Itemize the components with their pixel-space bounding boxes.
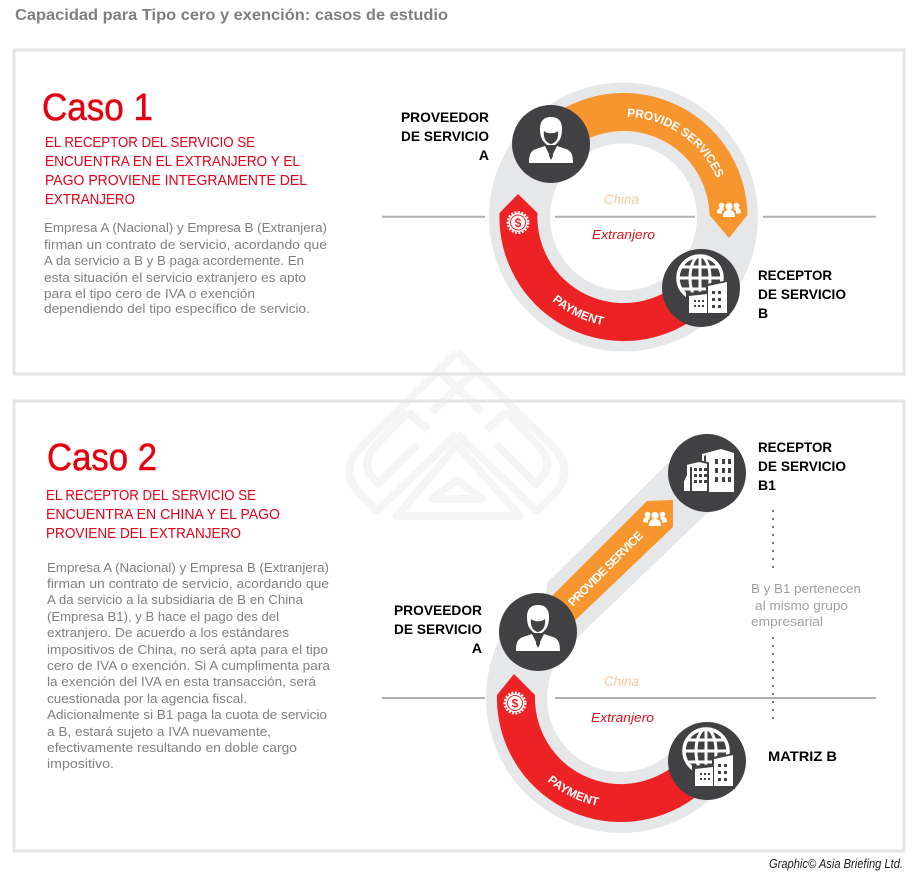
label: provider A: [401, 109, 489, 163]
arrow label: payment: PAYMENT: [552, 294, 604, 324]
label: Extranjero: Extranjero: [591, 710, 654, 725]
body text: case 1: [44, 220, 327, 316]
arrow label: payment: PAYMENT: [548, 775, 600, 806]
icon: people: [717, 203, 741, 217]
icon: provider A: [512, 105, 590, 183]
panel border: case 1: [14, 50, 904, 374]
icon: receiver B: [662, 249, 740, 327]
border dividers: [382, 216, 876, 218]
panel: case 1: [12, 48, 906, 376]
body text: case 2: la exención del IVA en esta transacción, será: [47, 674, 317, 689]
arrow: provide service: [540, 500, 673, 630]
watermark logo: [349, 352, 565, 516]
subheading: case 2: PROVIENE DEL EXTRANJERO: [46, 526, 241, 542]
label: receiver B1: RECEPTOR: [758, 439, 832, 455]
icon: provider A: [499, 593, 577, 671]
icon: dollar coin: [504, 692, 526, 714]
heading: Caso 2: Caso 2: [47, 437, 157, 479]
arrow: provide services: [560, 93, 748, 238]
body text: case 2: A da servicio a la subsidiaria de B en China: [47, 592, 304, 607]
body text: case 2: cuestionada por la agencia fiscal.: [47, 691, 247, 706]
subheading: case 1: [45, 135, 307, 208]
label: provider A: PROVEEDOR: [401, 109, 489, 125]
body text: case 2: impositivos de China, no será apta para el tipo: [47, 642, 328, 657]
panel border: case 2: [14, 401, 904, 851]
credit: Graphic© Asia Briefing Ltd.: [769, 857, 903, 871]
label: provider A: PROVEEDOR: [394, 602, 482, 618]
body text: case 2: (Empresa B1), y B hace el pago des del: [47, 609, 279, 624]
label: receiver B: [758, 267, 846, 321]
body text: case 1: Empresa A (Nacional) y Empresa B (Extranjera): [44, 220, 327, 235]
body text: case 2: impositivo.: [47, 756, 114, 771]
right divider: [555, 697, 876, 699]
gray track: [517, 463, 730, 802]
diagram: case 2 flow: [382, 434, 876, 833]
label: China: China: [604, 191, 639, 207]
body text: case 2: efectivamente resultando en doble cargo: [47, 740, 297, 755]
label: China: China: [604, 673, 639, 689]
note: same business group: [751, 581, 861, 629]
body text: case 1: dependiendo del tipo específico de servicio.: [44, 301, 310, 316]
body text: case 2: [47, 560, 331, 771]
body text: case 2: Empresa A (Nacional) y Empresa B (Extranjera): [47, 560, 329, 575]
subheading: case 1: PAGO PROVIENE INTEGRAMENTE DEL: [45, 173, 307, 189]
body text: case 2: Adicionalmente si B1 paga la cuota de servicio: [47, 707, 327, 722]
heading: Caso 1: Caso 1: [42, 87, 153, 129]
diagram: case 1 cycle: [382, 82, 876, 352]
body text: case 1: A da servicio a B y B paga acordemente. En: [44, 253, 304, 268]
label: receiver B1: DE SERVICIO: [758, 458, 846, 474]
subheading: case 1: EL RECEPTOR DEL SERVICIO SE: [45, 135, 255, 151]
left divider: [382, 697, 485, 699]
gray ring: [520, 113, 728, 321]
icon: parent B: [668, 722, 746, 800]
icon: receiver B1: [668, 434, 746, 512]
body text: case 1: esta situación el servicio extranjero es apto: [44, 270, 306, 285]
panel: case 2: [12, 400, 906, 852]
subheading: case 1: ENCUENTRA EN EL EXTRANJERO Y EL: [45, 154, 300, 170]
icon: people: [643, 512, 667, 526]
body text: case 2: extranjero. De acuerdo a los estándares: [47, 625, 290, 640]
title: Capacidad para Tipo cero y exención: casos de estudio: [15, 7, 448, 24]
label: receiver B1: [758, 439, 846, 493]
label: receiver B: RECEPTOR: [758, 267, 832, 283]
icon: dollar coin: [508, 212, 528, 233]
dotted connector: [772, 510, 774, 724]
note: same business group: al mismo grupo: [755, 598, 848, 613]
inner divider: [555, 216, 695, 218]
label: receiver B: B: [758, 305, 768, 321]
arrow: payment: [499, 194, 690, 341]
subheading: case 2: ENCUENTRA EN CHINA Y EL PAGO: [46, 507, 280, 523]
label: provider A: [394, 602, 482, 656]
label: parent B: MATRIZ B: [768, 748, 837, 764]
icon: dollar coin: $: [515, 216, 522, 230]
body text: case 2: firman un contrato de servicio, acordando que: [47, 576, 329, 591]
body text: case 2: cero de IVA o exención. Si A cumplimenta para: [47, 658, 331, 673]
arrow label: provide service: PROVIDE SERVICE: [568, 530, 644, 606]
label: provider A: A: [479, 147, 489, 163]
label: Extranjero: Extranjero: [592, 227, 655, 242]
subheading: case 2: [46, 488, 280, 542]
subheading: case 2: EL RECEPTOR DEL SERVICIO SE: [46, 488, 256, 504]
note: same business group: B y B1 pertenecen: [751, 581, 861, 596]
body text: case 1: firman un contrato de servicio, acordando que: [44, 237, 327, 252]
label: provider A: DE SERVICIO: [394, 621, 482, 637]
body text: case 2: a B, estará sujeto a IVA nuevamente,: [47, 724, 271, 739]
arrow label: provide services: PROVIDE SERVICES: [628, 108, 724, 178]
label: provider A: DE SERVICIO: [401, 128, 489, 144]
label: receiver B: DE SERVICIO: [758, 286, 846, 302]
label: provider A: A: [472, 640, 482, 656]
body text: case 1: para el tipo cero de IVA o exención: [44, 286, 255, 301]
arrow: payment: [497, 674, 695, 822]
note: same business group: empresarial: [751, 614, 823, 629]
icon: dollar coin: $: [512, 696, 519, 710]
label: receiver B1: B1: [758, 477, 776, 493]
subheading: case 1: EXTRANJERO: [45, 192, 135, 208]
